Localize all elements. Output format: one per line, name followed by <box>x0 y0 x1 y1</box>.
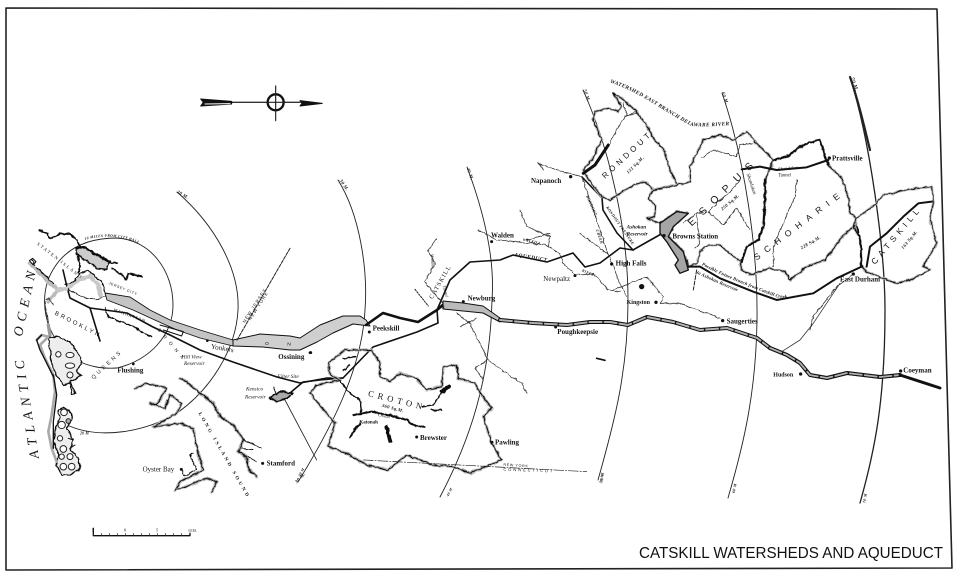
new york city labels: Hill View <box>181 355 202 361</box>
scale bar: 5 <box>156 528 158 533</box>
watershed labels: Napanoch <box>531 177 561 185</box>
new york city labels: 10 MILES FROM CITY HALL <box>84 234 139 244</box>
watershed labels: Possible Future Branch from Catskill Creek <box>702 262 787 298</box>
shore labels: LONG ISLAND SOUND <box>197 412 250 500</box>
lower hudson towns and arc labels: 60 M <box>731 483 738 494</box>
watershed labels: Browns Station <box>672 232 718 240</box>
croton labels: CROTON <box>367 388 427 412</box>
croton labels: 50 M <box>599 473 605 484</box>
watershed labels <box>531 77 924 325</box>
new york city labels: BRONX <box>157 327 188 364</box>
new york city labels: NEW JERSEY <box>242 287 268 324</box>
croton labels: WALKILL <box>522 238 542 246</box>
new york city labels: Yonkers <box>210 342 235 354</box>
shore labels: Oyster Bay <box>143 465 175 473</box>
croton labels: Brewster <box>420 434 447 442</box>
title: CATSKILL WATERSHEDS AND AQUEDUCT <box>639 545 944 562</box>
scale bar <box>92 528 197 536</box>
shore labels: 20 M <box>79 432 90 436</box>
shore labels <box>79 387 307 500</box>
watershed labels: 163 Sq.M. <box>901 230 919 251</box>
croton labels: Newpaltz <box>543 275 570 283</box>
compass rose <box>201 86 322 121</box>
watershed labels: to Ashokan Reservoir <box>696 271 738 291</box>
marsh islands <box>56 352 75 470</box>
watershed labels: Tunnel <box>778 174 792 179</box>
croton labels: 40 M <box>445 487 454 498</box>
watershed labels: ESOPUS <box>686 155 762 229</box>
catskill watersheds <box>520 77 938 330</box>
watershed labels: WATERSHED EAST BRANCH DELAWARE RIVER <box>611 79 729 126</box>
croton watershed and mid hudson: 40 M. <box>464 166 474 181</box>
watershed labels: RONDOUT <box>585 194 599 217</box>
croton labels: Peekskill <box>373 324 399 332</box>
watershed labels: Prattsville <box>832 155 863 163</box>
long island shore and scale bar <box>79 378 317 536</box>
shore labels: Kensico <box>245 387 263 393</box>
new york city labels: Reservoir <box>183 361 206 367</box>
croton labels: CATSKILL <box>428 264 453 300</box>
croton labels: Walden <box>491 232 514 240</box>
watershed labels: 70 M. <box>849 77 859 92</box>
new york city labels: N <box>287 342 293 348</box>
new york city labels: JERSEY CITY <box>108 281 138 296</box>
shore labels: Reservoir <box>244 394 267 400</box>
new york city labels: Ossining <box>278 353 305 361</box>
lower hudson towns and arc labels: Hudson <box>773 373 794 379</box>
watershed labels: RONDOUT <box>600 129 655 180</box>
new york city labels: STATEN ISLAND <box>35 242 83 281</box>
watershed labels: 131 Sq.M. <box>626 156 646 175</box>
scale bar: 0 <box>124 528 126 533</box>
new york city labels: NEW YORK <box>247 291 270 321</box>
watershed labels: 228 Sq.M. <box>799 235 822 252</box>
croton labels <box>297 232 605 498</box>
new york city labels: Filter Site <box>276 374 299 380</box>
lower hudson towns and arc labels: Coeyman <box>903 366 932 374</box>
croton labels: NEW YORK <box>503 463 529 468</box>
watershed labels: 50 M. <box>581 89 591 103</box>
croton labels: R <box>441 305 446 310</box>
atlantic ocean label <box>10 264 42 461</box>
shore labels: 30 M. <box>294 472 307 485</box>
watershed labels: Shandaken <box>745 173 756 196</box>
new york city labels <box>35 190 340 421</box>
watershed labels: 250 Sq.M. <box>720 194 741 213</box>
croton labels: 30 M <box>297 467 306 478</box>
croton labels: CONNECTICUT <box>503 467 554 473</box>
scale bar: 10 M. <box>188 529 197 533</box>
watershed labels: CATSKILL <box>869 204 924 266</box>
shore labels: Stamford <box>267 460 295 468</box>
watershed labels: CREEK <box>595 229 604 245</box>
watershed labels: RONDOUT PRESSURE <box>605 205 636 246</box>
new york city labels: 20 M. <box>175 190 189 201</box>
watershed labels: Shandaken <box>778 166 800 173</box>
croton labels: RIVER <box>581 269 595 277</box>
watershed labels: Saugerties <box>727 317 758 325</box>
croton labels: AQUEDUCT <box>513 252 548 264</box>
new york city labels: Flushing <box>117 366 144 374</box>
croton labels: Tunnel <box>442 285 450 298</box>
croton labels: Newburg <box>468 294 496 302</box>
croton labels: 360 Sq.M. <box>380 403 404 414</box>
watershed labels: High Falls <box>616 260 647 268</box>
catskill aqueduct main line <box>63 177 663 393</box>
croton labels: Poughkeepsie <box>557 328 598 336</box>
croton labels: Moodna <box>430 253 436 268</box>
croton labels: Croton <box>377 412 390 419</box>
new york city labels: O <box>265 341 271 347</box>
atlantic ocean label: ATLANTIC <box>11 354 42 461</box>
lower hudson towns and arc labels: 50 M <box>599 472 605 482</box>
lower hudson towns and arc labels <box>599 283 932 503</box>
lower hudson towns and arc labels: 70 M <box>861 493 868 503</box>
watershed labels: Kingston <box>627 300 651 306</box>
distance arcs from City Hall <box>45 77 885 503</box>
new york city labels: MANHATTAN <box>113 307 146 323</box>
jamaica bay and rockaway <box>37 325 82 475</box>
ashokan reservoir <box>660 212 688 273</box>
watershed labels: Reservoir <box>627 231 649 237</box>
scale bar: 5 <box>92 528 94 533</box>
croton watershed and mid hudson: 30 M. <box>337 178 349 192</box>
new york harbor waterways <box>29 230 152 337</box>
watershed labels: East Durham <box>840 276 880 284</box>
hudson river <box>105 293 940 388</box>
croton watershed and mid hudson <box>297 166 620 498</box>
new york city labels: BROOKLYN <box>53 311 102 339</box>
atlantic ocean label: OCEAN <box>10 264 40 338</box>
watershed labels: Ashokan <box>626 224 646 230</box>
croton labels: Katonah <box>359 420 378 425</box>
watershed labels: 60 M. <box>720 92 729 105</box>
croton labels: Pawling <box>495 439 520 447</box>
new york city labels: QUEENS <box>91 349 124 381</box>
watershed labels: SCHOHARIE <box>752 187 847 262</box>
